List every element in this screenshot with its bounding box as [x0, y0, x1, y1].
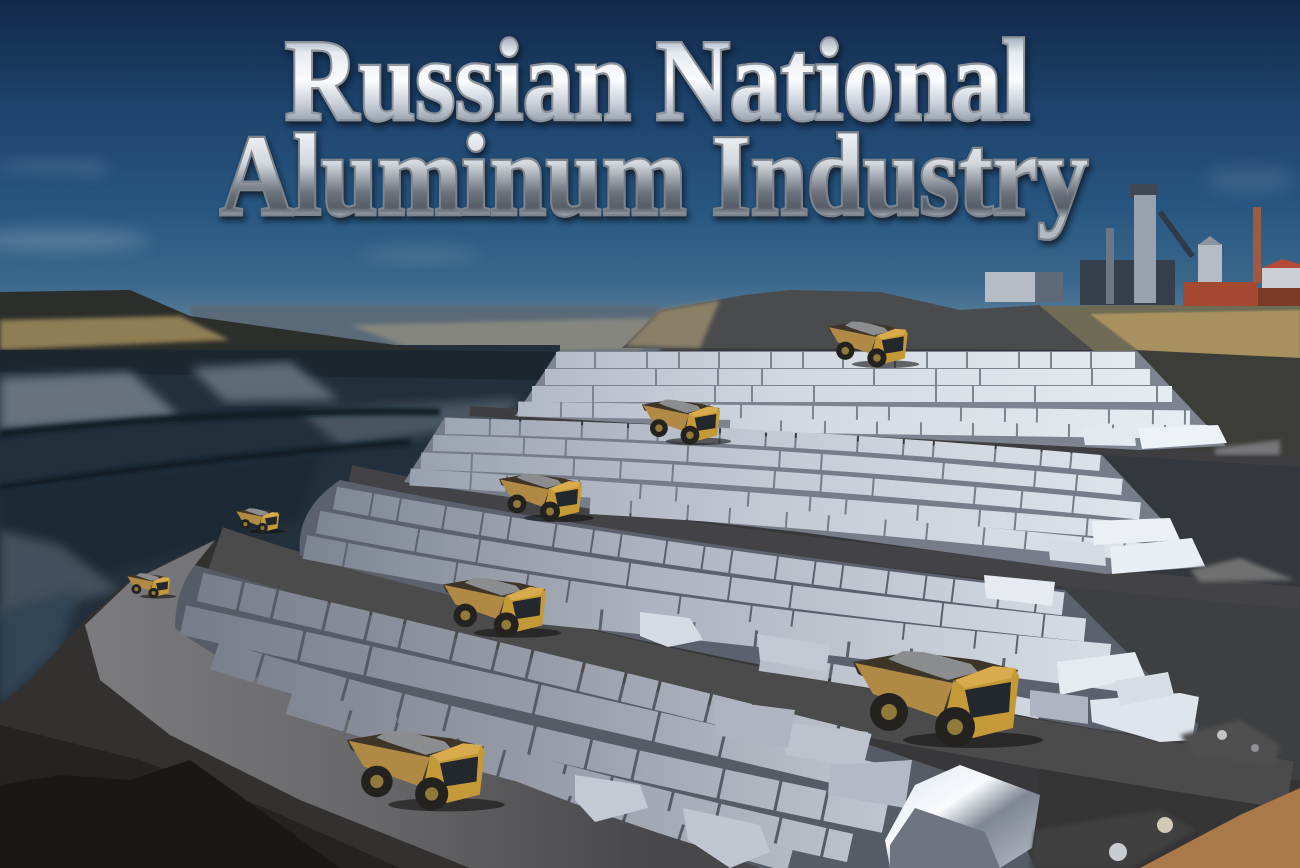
title	[220, 17, 1088, 240]
rock rubble	[1030, 440, 1295, 868]
truck: top of stack	[828, 321, 919, 368]
road beds between tiers	[215, 411, 1300, 785]
title: Russian National	[285, 17, 1030, 145]
truck: bottom road	[347, 731, 505, 811]
tan dirt corner	[1140, 788, 1300, 868]
tier 3 aluminium blocks	[300, 480, 1199, 742]
truck: second tier road	[499, 474, 594, 522]
truck: far left lower	[127, 573, 176, 598]
clouds	[0, 162, 1295, 260]
truck: third tier road	[443, 578, 561, 638]
sky background	[0, 0, 1300, 345]
title: Aluminum Industry	[220, 112, 1088, 240]
large foreground aluminium block	[885, 765, 1040, 868]
tier 2 aluminium blocks	[404, 417, 1206, 574]
left open pit terraces	[0, 290, 560, 730]
right background land	[1030, 304, 1300, 868]
mound behind top tier	[622, 290, 1095, 350]
truck: first tier road	[642, 399, 731, 445]
distant landscape	[190, 306, 660, 356]
ground base	[0, 345, 1300, 868]
steel plant	[985, 184, 1300, 306]
bottom haul road and ground	[0, 540, 760, 868]
truck: foreground right	[853, 651, 1043, 748]
truck: far left upper	[236, 508, 285, 533]
tier 4 aluminium blocks	[175, 565, 1035, 868]
tier 1 aluminium blocks	[515, 351, 1227, 450]
